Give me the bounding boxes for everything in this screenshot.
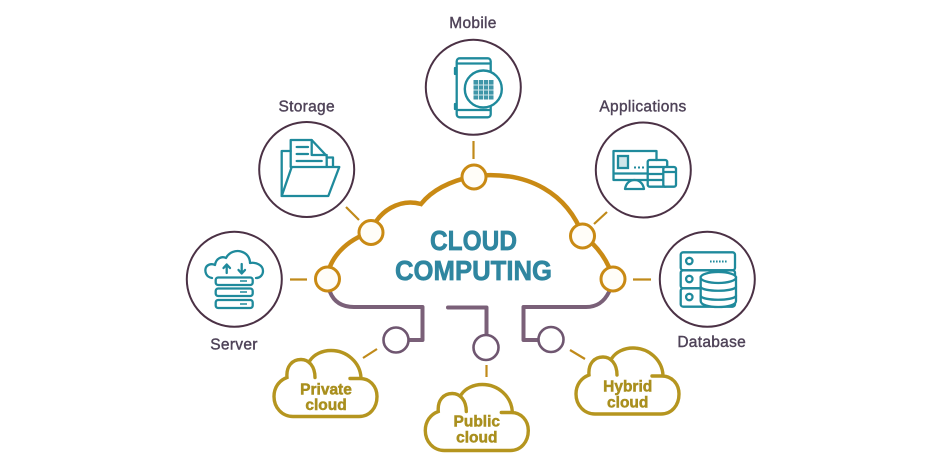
purple connector: public cloud bbox=[448, 308, 486, 335]
panel: applications bbox=[596, 98, 691, 218]
icon: monitor, tablet and phone bbox=[614, 151, 676, 189]
panel: storage: Storage bbox=[279, 98, 335, 116]
orange connector nodes bbox=[316, 165, 625, 291]
panel: database: Database bbox=[677, 334, 746, 351]
hybrid cloud: cloud bbox=[607, 394, 648, 412]
panel: mobile: Mobile bbox=[449, 15, 497, 32]
private cloud: Private bbox=[300, 382, 352, 398]
icon: cloud server bbox=[205, 251, 263, 308]
title: cloud computing bbox=[395, 225, 552, 286]
purple connector: private cloud bbox=[330, 292, 422, 340]
hybrid cloud: Hybrid bbox=[603, 378, 652, 396]
private cloud bbox=[274, 350, 377, 416]
central cloud outline bbox=[327, 175, 613, 279]
panel: server bbox=[187, 232, 282, 354]
public cloud: Public bbox=[454, 414, 500, 430]
icon: mobile phone bbox=[455, 58, 502, 117]
icon: database bbox=[681, 252, 736, 307]
panel: database bbox=[660, 232, 755, 351]
panel: storage bbox=[259, 98, 354, 217]
panel: mobile bbox=[426, 15, 521, 135]
purple connector: hybrid cloud bbox=[524, 292, 609, 340]
public cloud: cloud bbox=[456, 430, 497, 446]
hybrid cloud bbox=[576, 348, 679, 414]
private cloud: cloud bbox=[305, 397, 347, 414]
purple connector nodes bbox=[384, 327, 564, 360]
connector dashes bbox=[290, 141, 651, 377]
icon: folder with document bbox=[282, 140, 339, 196]
title: cloud computing: COMPUTING bbox=[395, 255, 552, 286]
public cloud bbox=[425, 384, 528, 450]
panel: applications: Applications bbox=[599, 98, 687, 116]
title: cloud computing: CLOUD bbox=[430, 225, 517, 256]
panel: server: Server bbox=[210, 336, 258, 354]
